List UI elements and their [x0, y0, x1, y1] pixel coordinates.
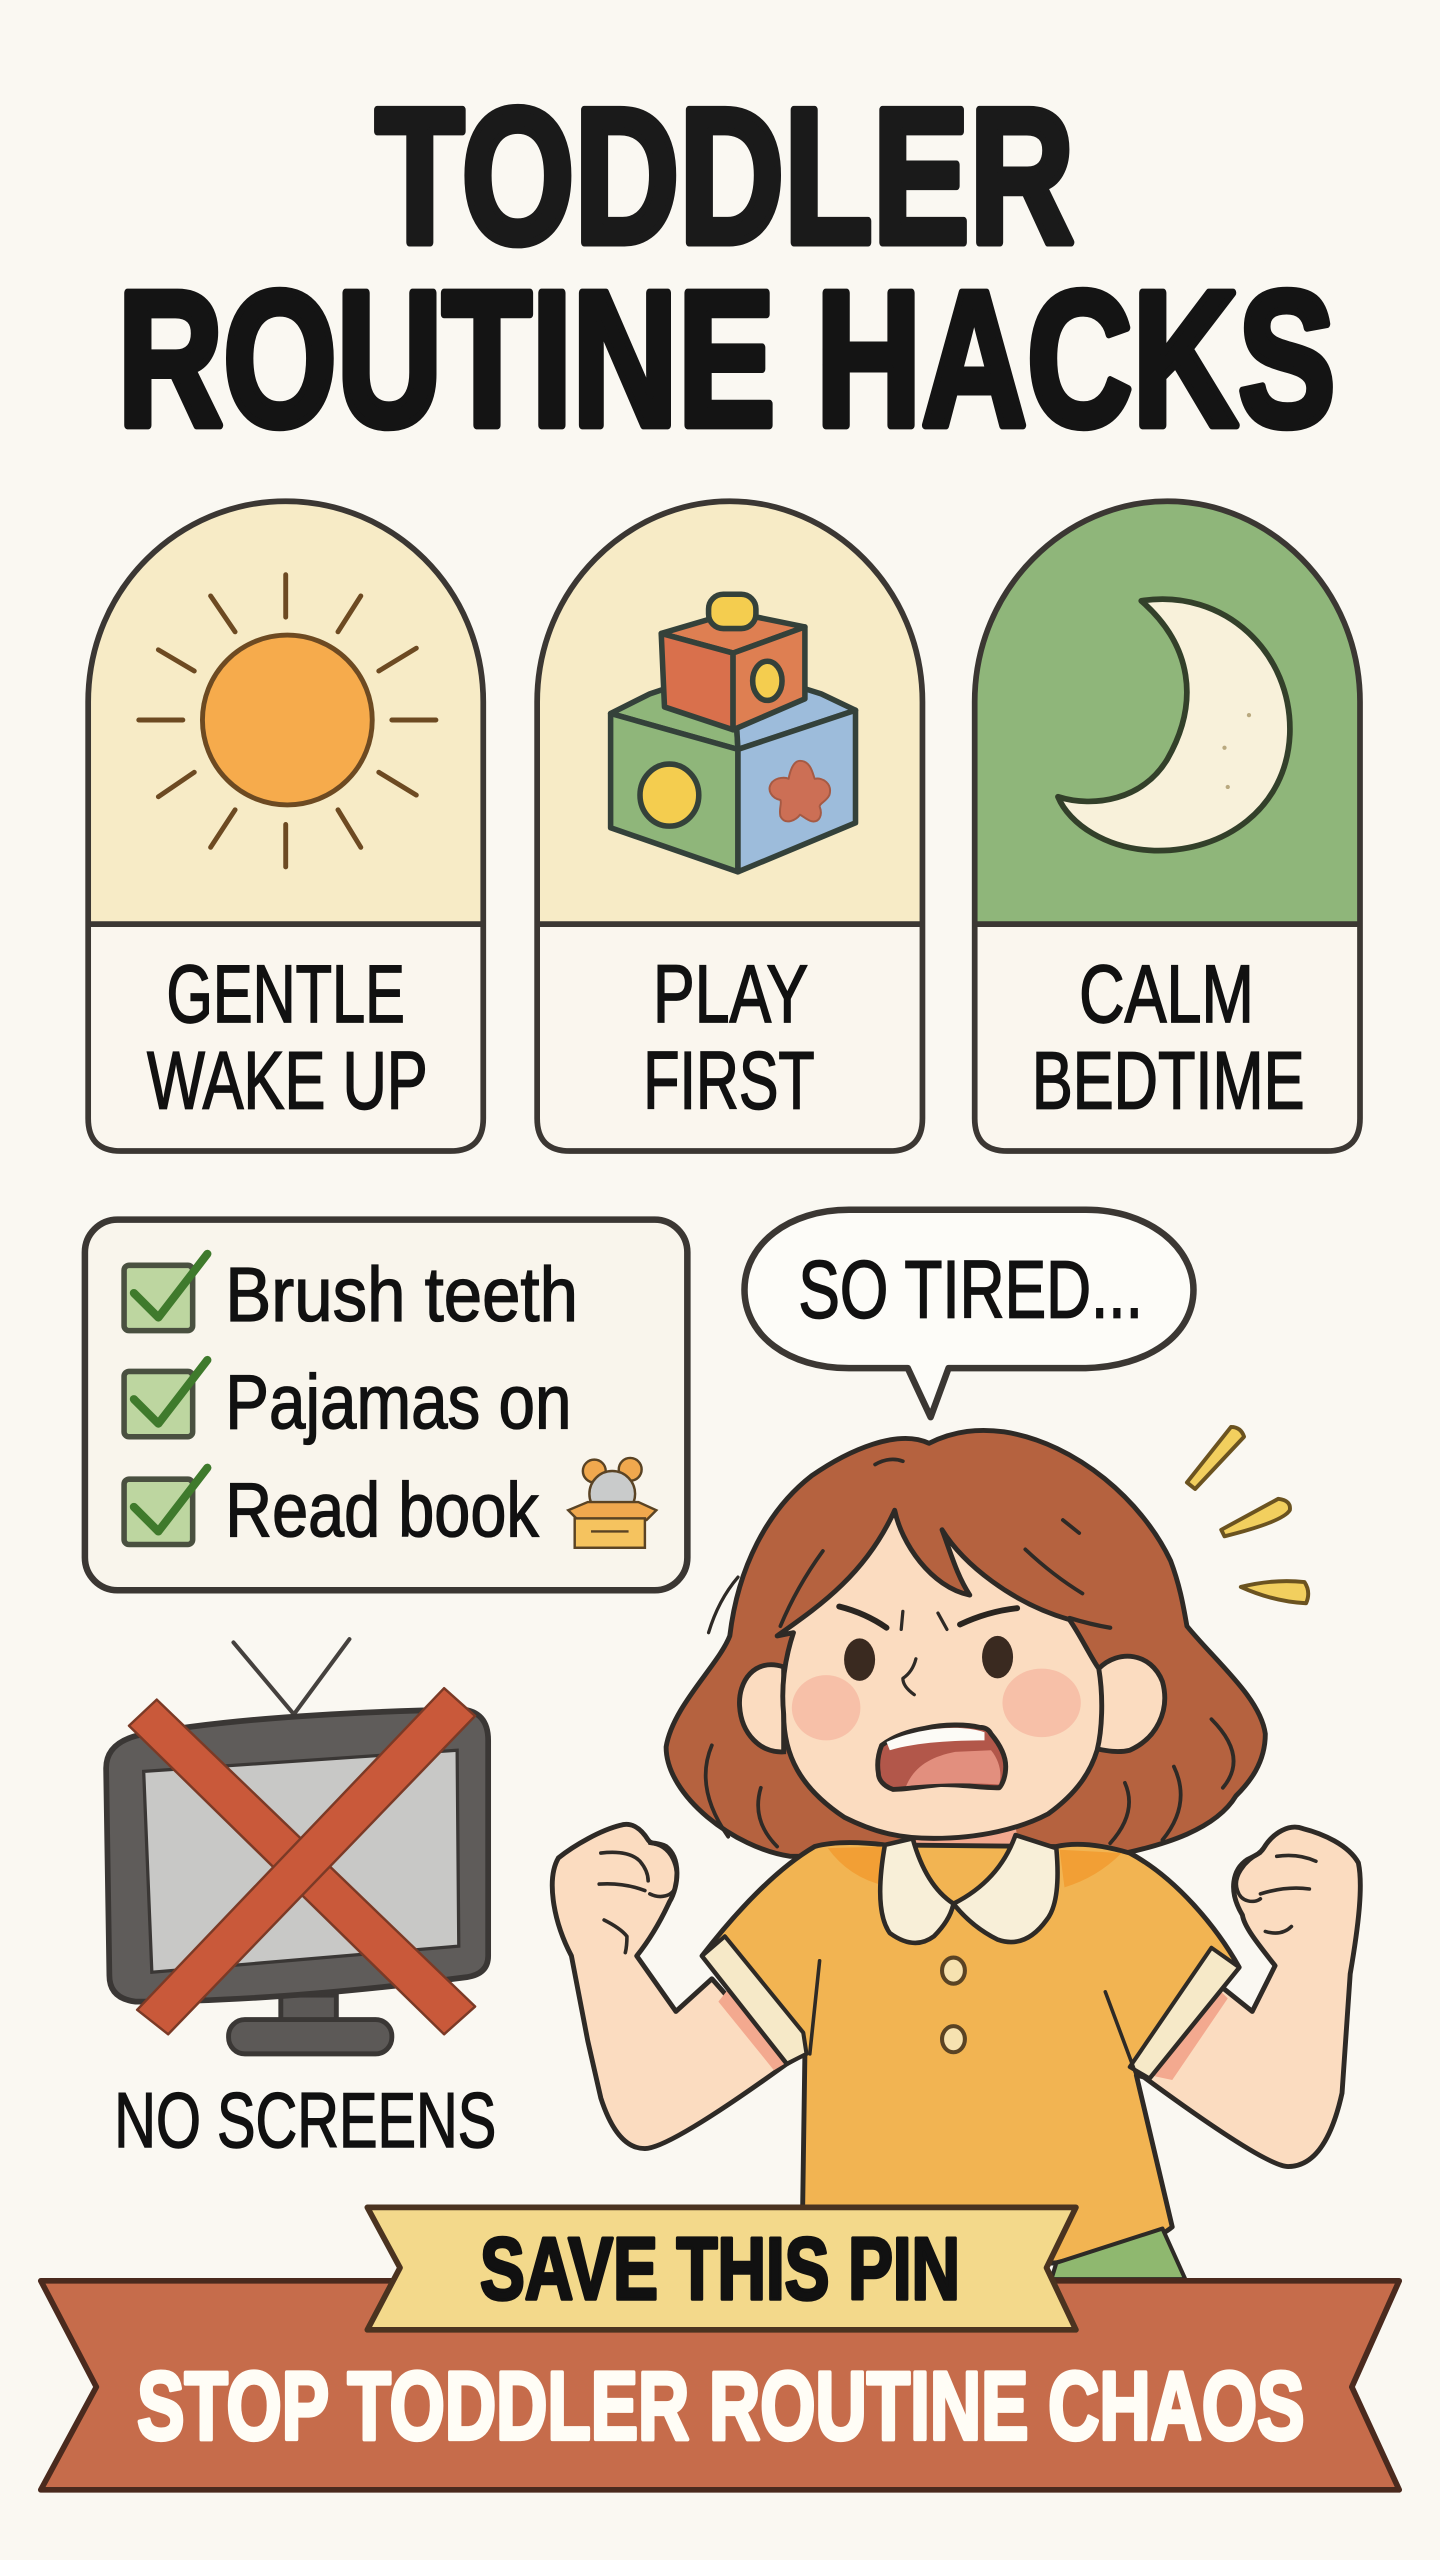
checkbox: pajamas on	[124, 1360, 207, 1437]
neck	[914, 1825, 1020, 1904]
item: brush teeth: Brush teeth	[225, 1253, 578, 1338]
label: gentle wake up: WAKE UP	[147, 1036, 428, 1127]
icon: toy blocks	[611, 594, 856, 872]
left eyebrow	[839, 1607, 887, 1628]
panel: calm bedtime card	[975, 501, 1360, 1151]
label: play first	[643, 949, 815, 1127]
hair strands	[706, 1459, 1234, 1847]
checkbox: read book	[124, 1468, 207, 1544]
character: upset toddler	[552, 1430, 1360, 2279]
sleeve cuff right	[1130, 1948, 1239, 2078]
icon: tv antenna	[233, 1639, 349, 1714]
icon: tv screen	[144, 1750, 459, 1972]
shirt shoulder shade right	[1060, 1850, 1122, 1887]
icon: tv body	[106, 1709, 488, 2002]
ribbon text: SAVE THIS PIN	[480, 2219, 960, 2318]
label: calm bedtime	[1032, 949, 1304, 1127]
left cheek	[792, 1675, 860, 1740]
arm shadows	[718, 1982, 1228, 2080]
collar	[880, 1835, 1058, 1943]
sleeve cuff left	[702, 1936, 807, 2064]
checkbox: brush teeth	[124, 1254, 207, 1331]
icon: mouse in a box	[568, 1458, 656, 1548]
mouth	[878, 1725, 1006, 1789]
panel: bedtime checklist	[85, 1220, 687, 1590]
panel: gentle wake up card	[88, 501, 483, 1151]
banner: stop toddler routine chaos	[41, 2281, 1399, 2490]
label: play first: PLAY	[653, 949, 808, 1040]
label: play first: FIRST	[643, 1036, 815, 1127]
right eye	[982, 1636, 1013, 1678]
left arm and fist	[552, 1824, 787, 2149]
ribbon: save this pin	[367, 2207, 1076, 2330]
item: read book: Read book	[225, 1468, 539, 1553]
icon: frustration sparks	[1187, 1427, 1308, 1603]
icon: tv stand	[229, 1995, 392, 2054]
speech bubble	[744, 1210, 1193, 1417]
icon: sun	[139, 575, 436, 867]
button top	[942, 1958, 965, 1984]
shirt	[702, 1843, 1239, 2278]
item: pajamas on: Pajamas on	[225, 1361, 571, 1446]
button bottom	[942, 2026, 965, 2052]
title	[118, 68, 1336, 466]
title: TODDLER	[376, 68, 1074, 283]
nose and frown	[901, 1611, 947, 1695]
label: calm bedtime: CALM	[1079, 949, 1254, 1040]
text: so tired: SO TIRED...	[798, 1245, 1143, 1336]
label: gentle wake up: GENTLE	[167, 949, 405, 1040]
right arm and fist	[1141, 1827, 1360, 2167]
shirt shoulder shade left	[828, 1847, 885, 1886]
stray hair	[709, 1577, 738, 1633]
right ear	[1096, 1656, 1165, 1752]
label: calm bedtime: BEDTIME	[1032, 1036, 1304, 1127]
face	[777, 1510, 1102, 1838]
hair back	[666, 1430, 1265, 1856]
icon: crescent moon	[1058, 599, 1290, 851]
left ear	[739, 1665, 784, 1752]
right cheek	[1002, 1669, 1081, 1737]
label: gentle wake up	[147, 949, 428, 1127]
label: no screens: NO SCREENS	[114, 2076, 496, 2164]
no screens tv	[106, 1639, 496, 2164]
left eye	[844, 1638, 875, 1681]
pants	[1051, 2229, 1185, 2279]
panel: play first card	[537, 501, 922, 1151]
icon: red cross	[129, 1688, 475, 2034]
right eyebrow	[960, 1608, 1017, 1624]
bang tip line	[777, 1618, 1110, 1636]
